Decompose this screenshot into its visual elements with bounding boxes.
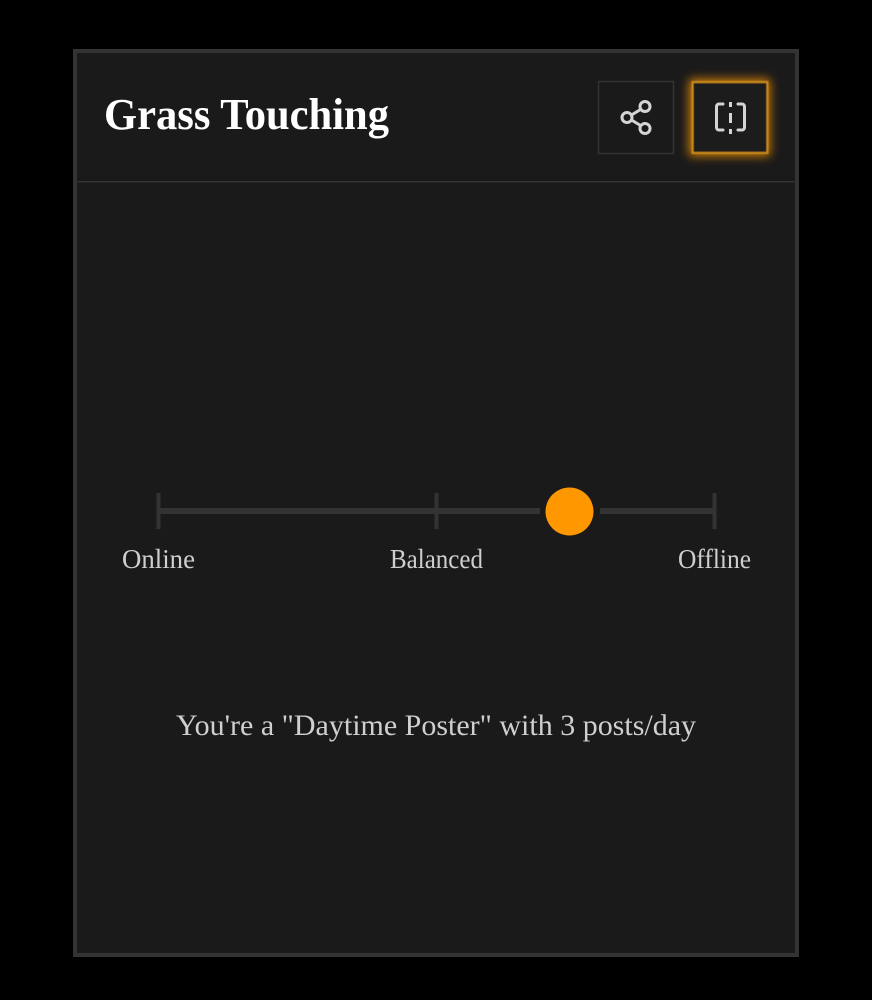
- button: compare (active): [689, 79, 770, 156]
- label: Offline: Offline: [678, 544, 751, 574]
- button: share: [598, 82, 674, 154]
- chart: slider scale: [122, 488, 751, 574]
- label: Balanced: Balanced: [390, 544, 483, 574]
- label: Online: Online: [122, 544, 195, 574]
- heading: Grass Touching: Grass Touching: [104, 90, 389, 139]
- header divider: [77, 181, 795, 182]
- icon: share: [622, 102, 650, 134]
- icon: split view: [716, 104, 745, 130]
- marker: position: [546, 488, 594, 536]
- panel: card: [75, 51, 797, 955]
- text: result summary: You're a "Daytime Poster" with 3 posts/day: [176, 709, 696, 742]
